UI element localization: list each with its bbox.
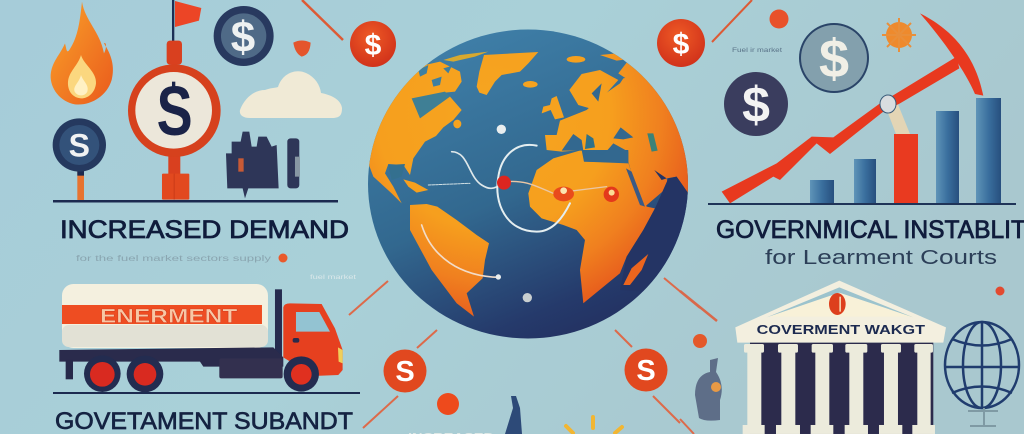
- baseline: [53, 200, 338, 202]
- Eurasia: [545, 74, 688, 206]
- route lines: [422, 145, 607, 277]
- icon: globe stand: [968, 408, 998, 426]
- baseline: [53, 392, 360, 394]
- Arctic patches: [443, 52, 488, 62]
- icon: orange sun: [882, 18, 916, 52]
- connector lines mid: [349, 278, 700, 434]
- icon: government building: COVERMENT WAKGT: [757, 322, 925, 337]
- icon: fuel tanker truck: ENERMENT: [100, 307, 238, 328]
- icon: coin bottom left: [384, 350, 426, 392]
- icon: dollar sign on post: [53, 118, 106, 200]
- icon: connector handle: [886, 102, 910, 134]
- icon: coin top right: $: [673, 28, 690, 61]
- icon: red ember dot: [693, 334, 707, 348]
- Madagascar: [623, 254, 648, 285]
- subheading: for Learment Courts: [765, 247, 997, 269]
- icon: government building: [735, 281, 946, 434]
- bar chart: [708, 98, 1016, 205]
- icon: dollar gauge with flag: S: [157, 72, 193, 150]
- caption: faint note: fuel market: [310, 275, 357, 281]
- panel: government subsidy: [53, 275, 360, 434]
- icon: coin top right: [657, 19, 705, 67]
- icon: navy dollar coin: [214, 6, 311, 66]
- Scandinavia and UK: [569, 70, 618, 108]
- icon: industrial skyline: [226, 132, 300, 198]
- icon: grey dollar coin: $: [819, 29, 849, 89]
- icon: small red dot: [278, 254, 288, 262]
- icon: dollar sign on post: S: [69, 128, 90, 164]
- icon: navy dollar coin: $: [231, 13, 255, 62]
- connector left: [680, 291, 717, 321]
- icon: sun rays: [566, 417, 622, 433]
- icon: cloud: [240, 71, 342, 118]
- icon: grey dollar coin: [799, 23, 869, 93]
- icon: orange dot: [437, 393, 459, 415]
- icon: coin top left: [350, 21, 396, 67]
- panel: increased demand: [51, 0, 349, 263]
- icon: dark dollar coin: [724, 72, 788, 136]
- icon: coin bottom right: [624, 348, 668, 392]
- icon: oil pump figure: [695, 358, 722, 421]
- arrow: rising trend as pickaxe: [722, 13, 983, 203]
- panel: government market building: [680, 281, 1020, 434]
- icon: flame: [51, 2, 113, 105]
- Caribbean: [403, 179, 428, 193]
- inland seas and lakes: [388, 83, 667, 207]
- caption: faint text: for the fuel market sectors supply: [76, 254, 271, 263]
- icon: oil derrick: [505, 396, 522, 434]
- icon: coin bottom right: S: [636, 355, 656, 387]
- dark bay east: [624, 176, 688, 292]
- globe: [360, 30, 707, 338]
- Greenland: [477, 52, 538, 95]
- icon: dollar gauge with flag: [128, 0, 221, 200]
- ocean: [368, 30, 688, 338]
- illustration: red dollar coins with connector lines: [302, 0, 752, 434]
- route markers: [496, 125, 619, 302]
- connector top right: [712, 0, 752, 42]
- caption: red dot note: [996, 286, 1004, 296]
- icon: dark dollar coin: $: [742, 77, 770, 133]
- icon: coin bottom left: S: [395, 356, 415, 388]
- connector top left: [302, 0, 343, 40]
- North America: [360, 62, 462, 203]
- icon: fuel tanker truck: [59, 284, 343, 392]
- icon: coin top left: $: [365, 29, 382, 62]
- panel: governmental instability: [708, 10, 1024, 269]
- caption: small notes: Fuel ir market: [732, 47, 782, 54]
- continents: [360, 52, 707, 317]
- heading: increased demand: INCREASED DEMAND: [60, 216, 349, 244]
- Africa: [528, 150, 655, 303]
- heading: governmental instability: GOVERNMICAL INSTABLIT: [716, 216, 1024, 244]
- icon: small red swirl: [770, 10, 788, 28]
- icon: wireframe globe: [945, 322, 1020, 408]
- icon: joint: [880, 95, 896, 113]
- South America: [410, 204, 489, 317]
